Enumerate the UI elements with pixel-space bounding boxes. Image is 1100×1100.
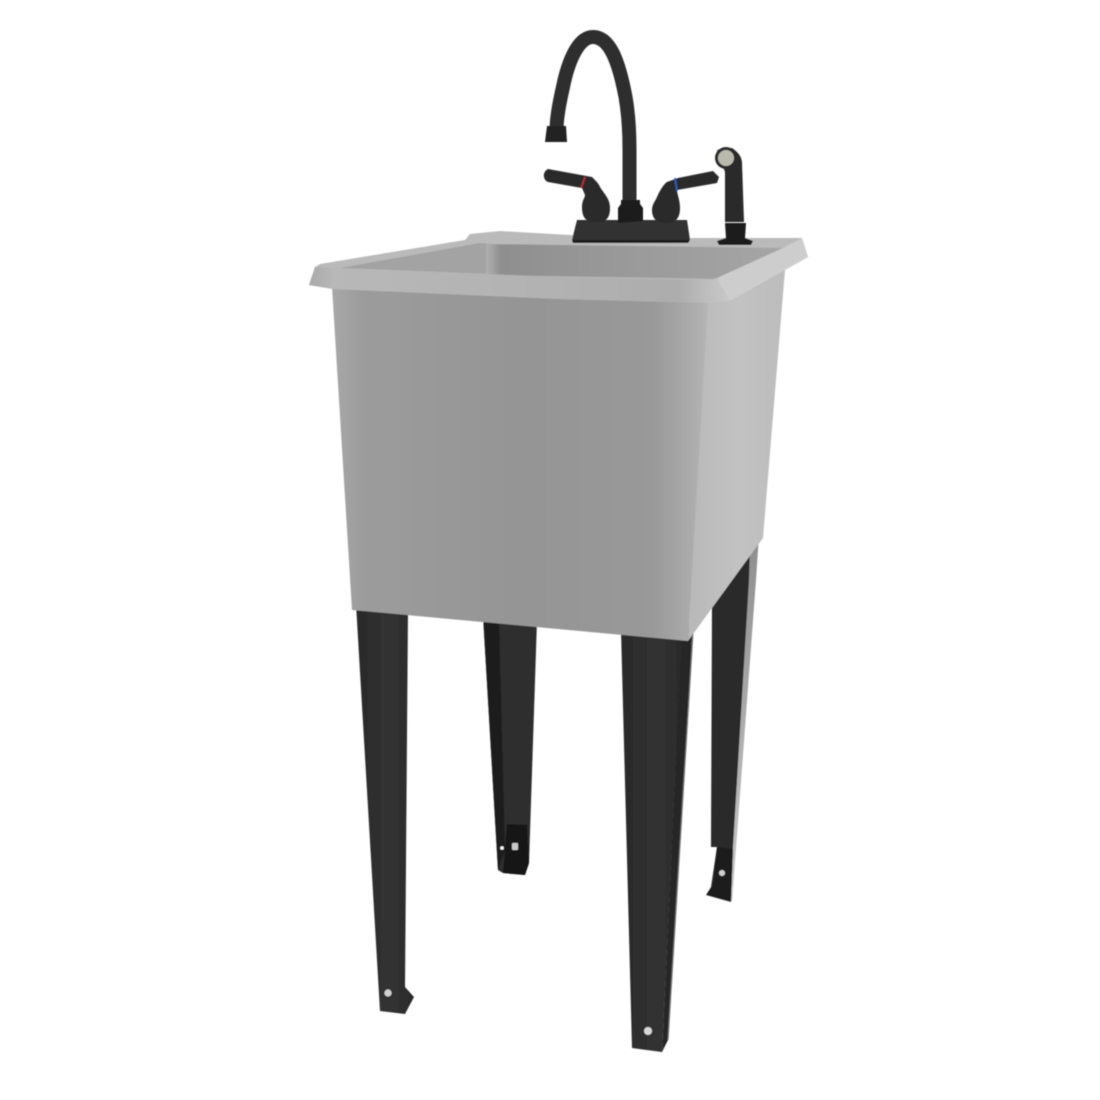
basin body: front face bbox=[332, 287, 710, 641]
faucet bbox=[544, 37, 719, 243]
spout nozzle bbox=[545, 126, 567, 142]
basin left inner wall bbox=[340, 243, 492, 274]
deck plate bbox=[572, 220, 690, 243]
sprayer head bbox=[715, 147, 737, 169]
basin body: right side panel bbox=[688, 270, 785, 641]
basin back wall bbox=[486, 244, 783, 279]
basin rim and interior bbox=[309, 231, 808, 303]
right handle, blue mark bbox=[652, 171, 719, 223]
front right leg bbox=[621, 625, 693, 1052]
rear center leg bbox=[483, 615, 537, 875]
rim silhouette and rear ledge bbox=[309, 231, 808, 303]
rear right leg bbox=[706, 535, 759, 902]
side sprayer bbox=[715, 147, 753, 245]
front left leg bbox=[356, 604, 414, 1014]
center base collar bbox=[618, 200, 643, 223]
rim front edge bbox=[309, 267, 730, 303]
front right leg bolt bbox=[644, 1027, 652, 1035]
rim right edge bbox=[717, 238, 808, 301]
left handle, red mark bbox=[544, 169, 610, 222]
gooseneck spout bbox=[556, 37, 630, 205]
